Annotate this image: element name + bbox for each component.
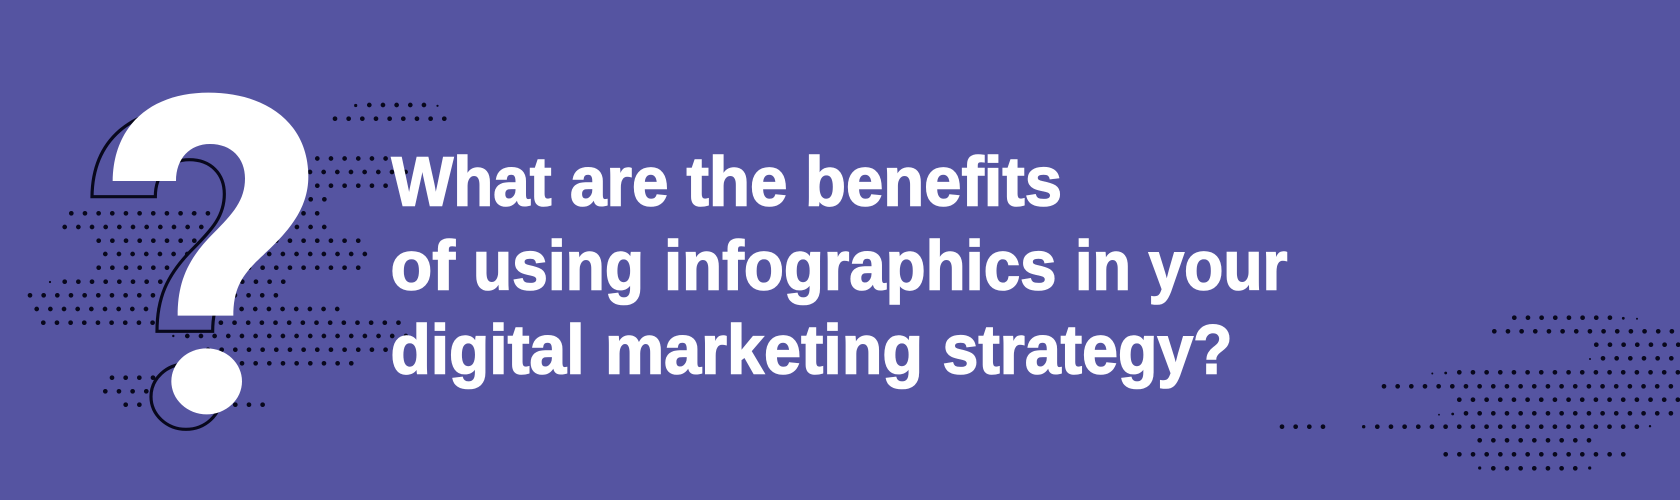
title line 1 xyxy=(392,142,1062,220)
halftone dots: tapered edge dots xyxy=(49,104,1651,470)
halftone dots: behind question mark xyxy=(30,105,445,405)
question mark white fill xyxy=(113,93,308,414)
title line 1: benefits xyxy=(805,142,1062,220)
title line 2: using xyxy=(473,226,644,304)
halftone dots: bottom right xyxy=(1282,318,1679,468)
title line 1: the xyxy=(686,142,788,220)
title xyxy=(390,142,1288,388)
title line 3: digital xyxy=(390,310,584,388)
title line 3: marketing xyxy=(605,310,923,388)
title line 1: are xyxy=(570,142,668,220)
title line 3: strategy? xyxy=(942,310,1232,388)
title line 2: your xyxy=(1148,226,1288,304)
title line 3 xyxy=(390,310,1232,388)
icon: question mark xyxy=(92,93,308,429)
question mark outline shadow xyxy=(92,108,288,429)
title line 2: infographics xyxy=(664,226,1056,304)
title line 2: of xyxy=(390,226,456,304)
title line 2 xyxy=(390,226,1288,304)
title line 1: What xyxy=(392,142,552,220)
title line 2: in xyxy=(1075,226,1131,304)
